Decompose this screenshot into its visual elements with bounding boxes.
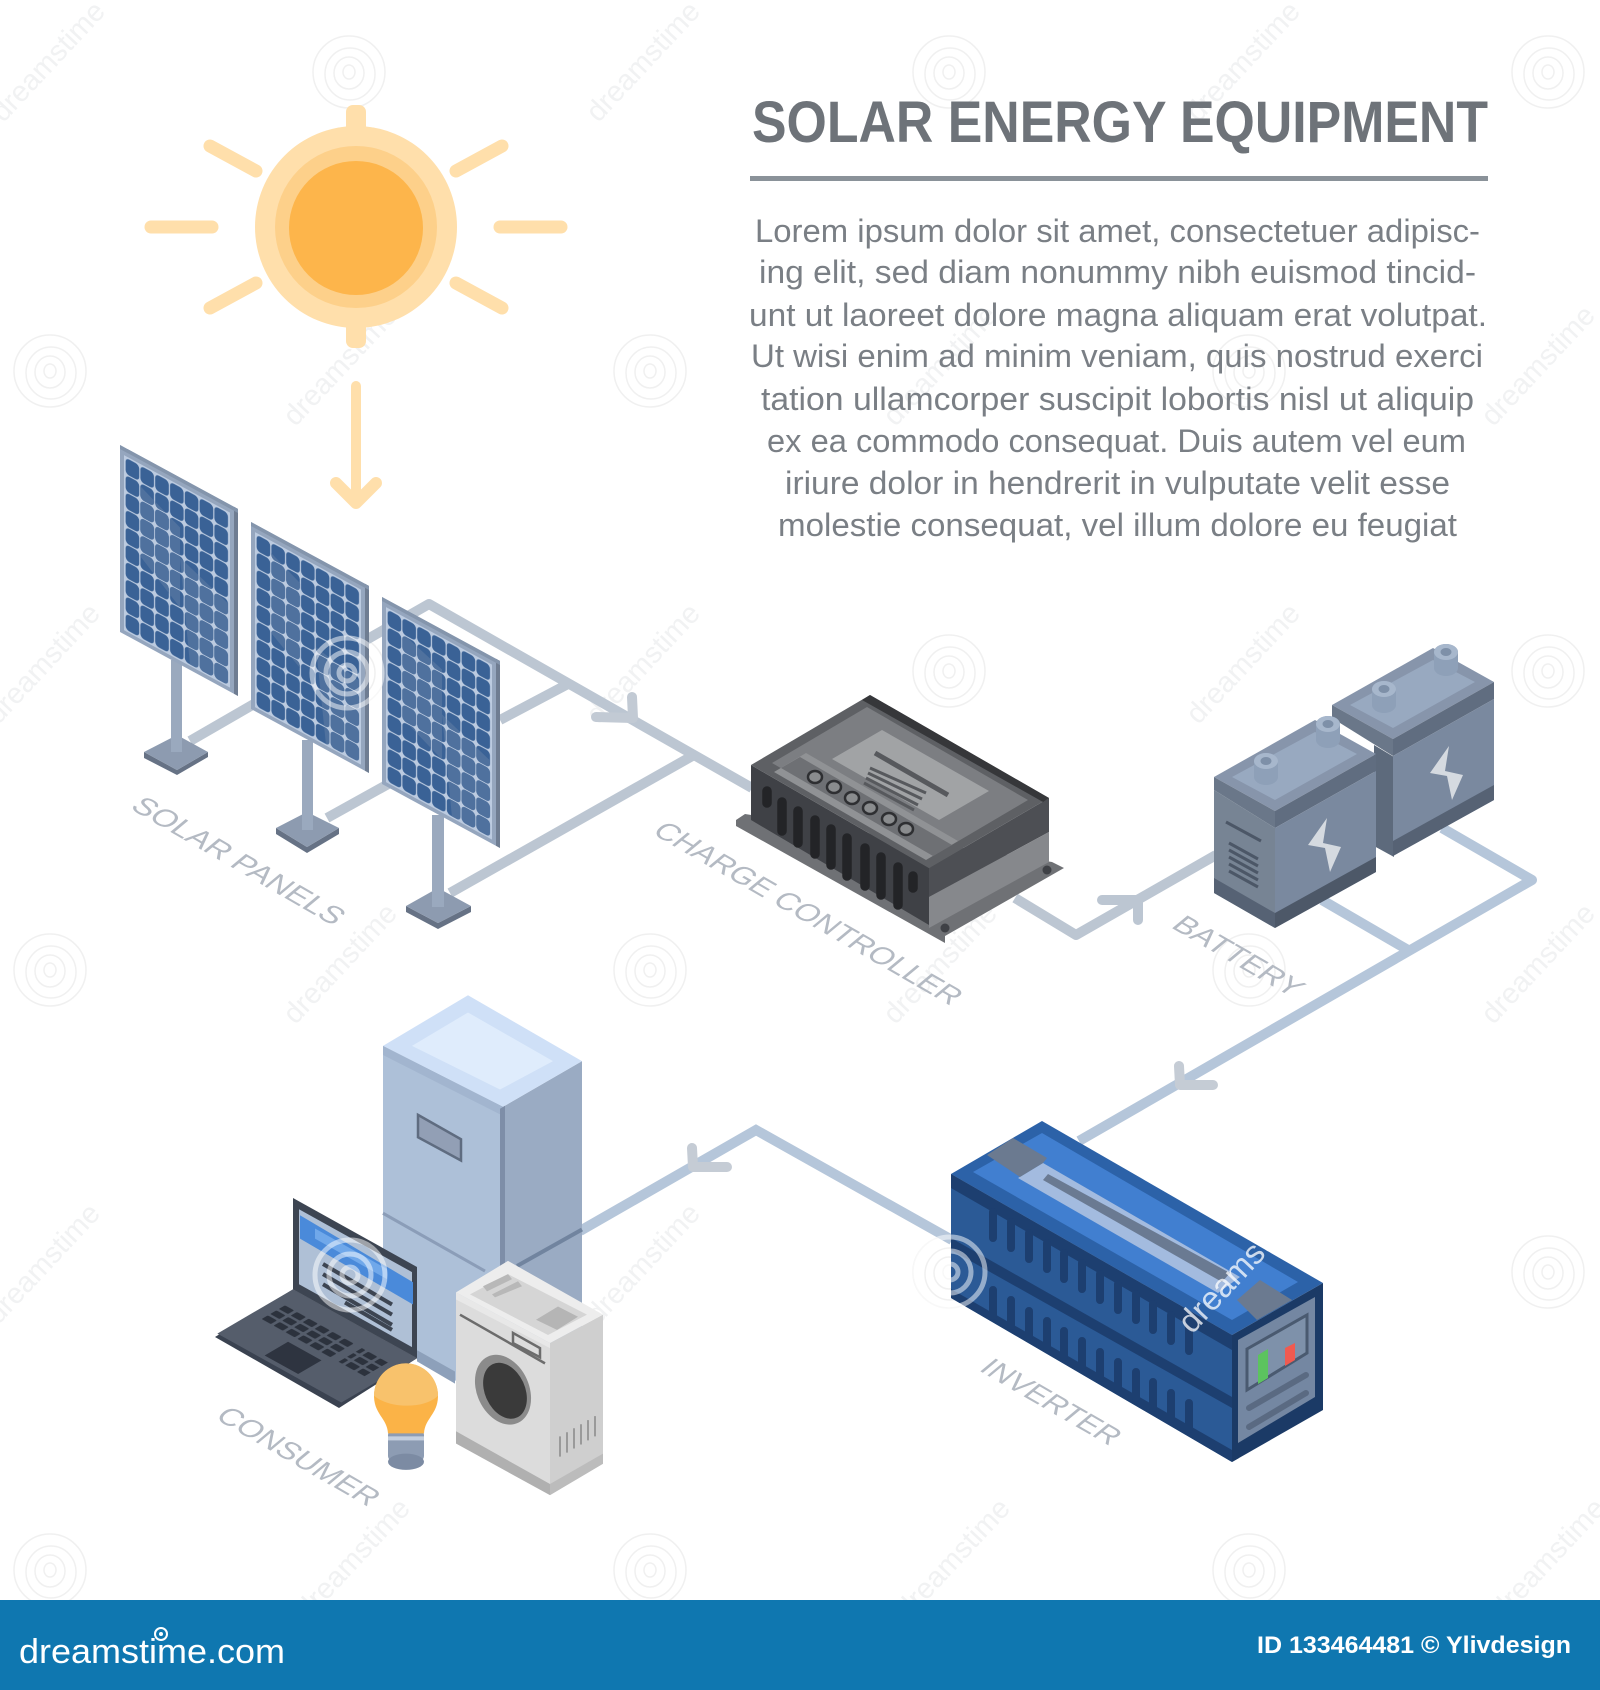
panel: charge controller <box>736 695 1064 943</box>
panel: solar panel 3 <box>382 597 500 929</box>
title: SOLAR ENERGY EQUIPMENT <box>752 90 1488 155</box>
appliance: light bulb <box>374 1363 438 1470</box>
label: consumer: CONSUMER <box>209 1402 387 1511</box>
back battery terminal <box>1434 644 1458 676</box>
watermark pattern: dreamstime <box>290 1493 417 1625</box>
label: inverter: INVERTER <box>973 1354 1129 1450</box>
body text block: Lorem ipsum dolor sit amet, consectetuer adipisc- <box>755 213 1480 249</box>
body text block: ex ea commodo consequat. Duis autem vel eum <box>767 423 1466 459</box>
body text block <box>749 213 1487 543</box>
controller top face <box>751 695 1049 868</box>
footer image credit: ID 133464481 © Ylivdesign <box>1257 1632 1571 1659</box>
body text block: unt ut laoreet dolore magna aliquam erat volutpat. <box>749 297 1487 333</box>
panel: front battery <box>1214 716 1376 928</box>
watermark pattern: dreamstime <box>1475 300 1600 432</box>
wires: panel array to charge controller <box>190 604 752 893</box>
wires: battery to inverter <box>1079 828 1532 1141</box>
panel: inverter <box>951 1121 1323 1462</box>
arrow: wire flow to battery <box>1102 900 1138 920</box>
battery side vent lines <box>1226 822 1261 887</box>
inverter front face <box>1232 1283 1323 1462</box>
watermark pattern: dreamstime <box>277 300 404 432</box>
icon: sun <box>151 105 561 348</box>
panel: consumer appliances <box>215 995 603 1495</box>
watermark overlays on equipment: dreamstime <box>1170 1188 1315 1340</box>
back battery terminal <box>1372 681 1396 713</box>
appliance: laptop <box>215 1198 417 1408</box>
controller buttons <box>808 771 913 835</box>
watermark overlays on equipment <box>312 638 1315 1340</box>
inverter vents lower row <box>993 1290 1189 1429</box>
body text block: molestie consequat, vel illum dolore eu feugiat <box>778 507 1457 543</box>
front battery lightning <box>1308 818 1341 872</box>
label: battery: BATTERY <box>1165 911 1311 1002</box>
body text block: Ut wisi enim ad minim veniam, quis nostrud exerci <box>751 338 1483 374</box>
watermark pattern: dreamstime <box>580 1198 707 1330</box>
front battery terminal <box>1254 753 1278 785</box>
watermark pattern: dreamstime <box>277 898 404 1030</box>
arrow: wire flow to controller <box>596 697 633 718</box>
footer bar <box>0 1600 1600 1690</box>
inverter top face <box>951 1121 1323 1335</box>
back battery lightning <box>1430 746 1463 800</box>
body text block: tation ullamcorper suscipit lobortis nisl ut aliquip <box>761 381 1474 417</box>
controller screen text lines <box>864 753 948 810</box>
controller left face <box>751 765 929 925</box>
panel: back battery <box>1332 644 1494 857</box>
panel: solar panel 1 <box>120 445 238 775</box>
body text block: iriure dolor in hendrerit in vulputate velit esse <box>785 465 1450 501</box>
watermark pattern: dreamstime <box>580 598 707 730</box>
panel: solar panel 2 <box>251 522 369 853</box>
arrow: wire flow to inverter <box>1179 1066 1213 1085</box>
watermark pattern: dreamstime <box>890 1493 1017 1625</box>
controller vents <box>767 791 913 905</box>
front battery terminal <box>1316 716 1340 748</box>
controller bolts <box>940 866 1052 932</box>
appliance: refrigerator <box>383 995 582 1386</box>
appliance: washing machine <box>456 1261 603 1495</box>
watermark pattern: dreamstime <box>1475 898 1600 1030</box>
watermark pattern: dreamstime <box>1180 598 1307 730</box>
controller mounting plate <box>736 814 1064 943</box>
wires: inverter to consumer <box>580 1130 952 1240</box>
label: solar panels: SOLAR PANELS <box>124 792 353 930</box>
watermark pattern: dreamstime <box>877 300 1004 432</box>
title rule <box>750 176 1488 181</box>
watermark pattern: dreamstime <box>877 898 1004 1030</box>
body text block: ing elit, sed diam nonummy nibh euismod tincid- <box>759 254 1476 290</box>
arrow: wire flow to consumer <box>692 1148 727 1167</box>
inverter side face <box>951 1174 1239 1462</box>
label: charge controller: CHARGE CONTROLLER <box>646 817 970 1010</box>
arrow: sunlight to panels <box>336 386 376 503</box>
footer logo: dreamstime.com <box>19 1633 285 1671</box>
wires: controller to battery <box>1015 855 1216 935</box>
controller right face <box>929 798 1049 928</box>
inverter vents upper row <box>993 1212 1189 1351</box>
